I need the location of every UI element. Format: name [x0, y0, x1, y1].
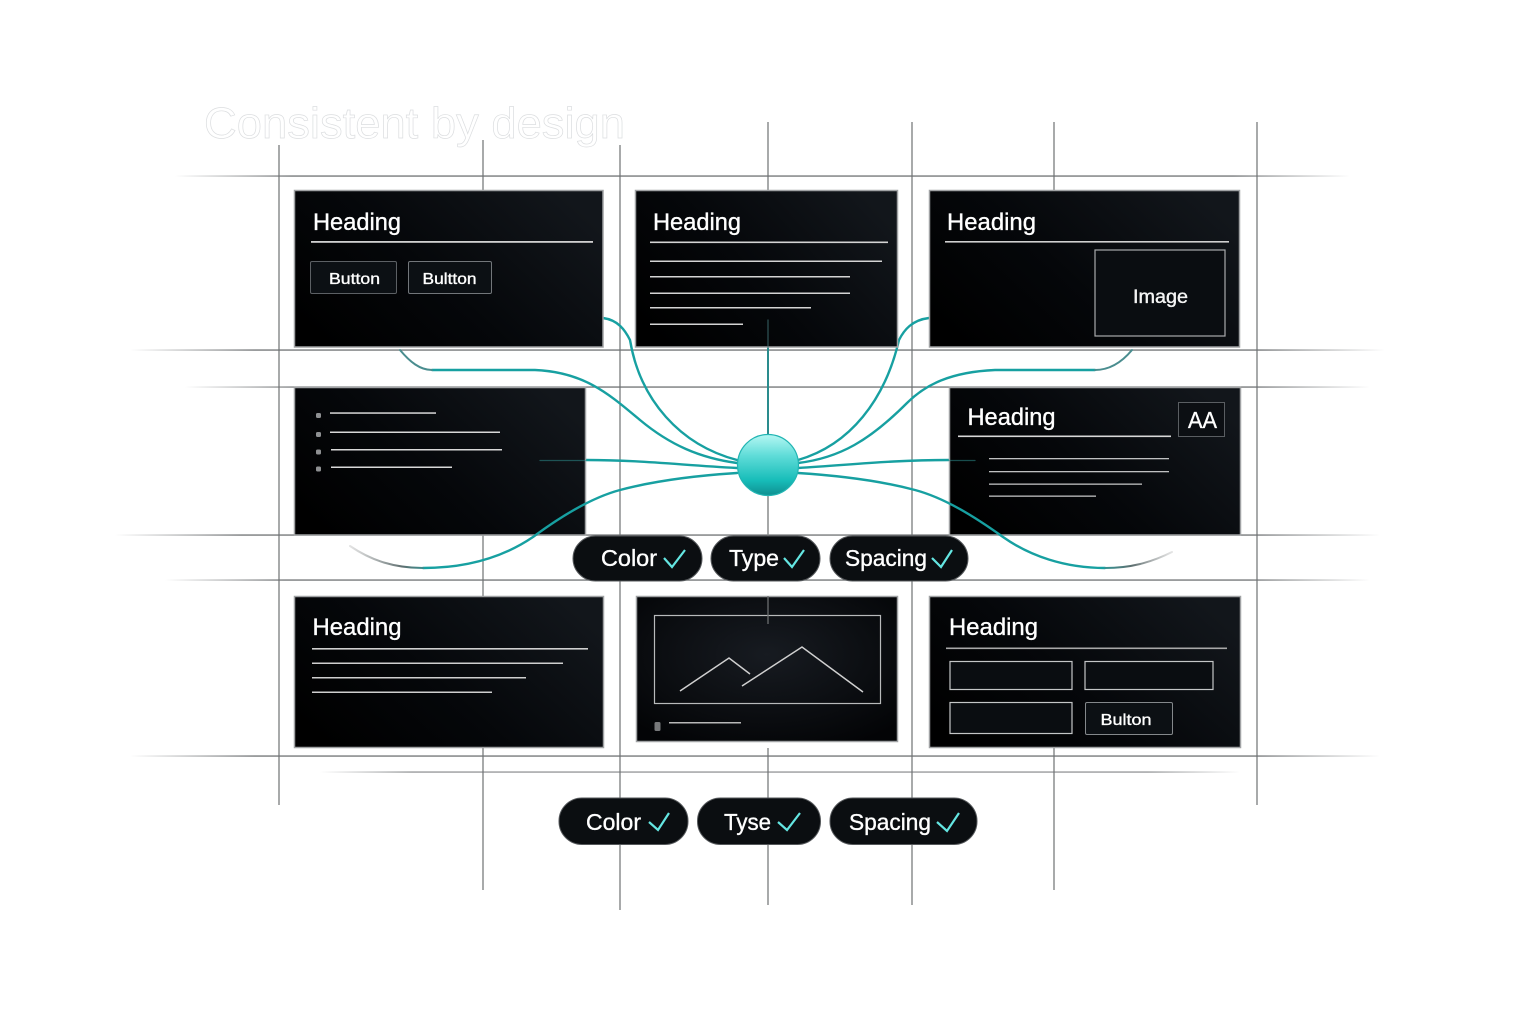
connector lines to hub: [400, 318, 1132, 536]
pill: type: Type: [729, 545, 779, 571]
image placeholder: Image: [1133, 287, 1188, 308]
button: [1086, 702, 1172, 734]
pill: tyse: [698, 798, 820, 844]
layout grid lines: [115, 122, 1385, 910]
pill: color: [559, 798, 688, 844]
pill: spacing: Spacing: [849, 809, 931, 835]
bullets: [316, 413, 321, 472]
divider: [958, 436, 1171, 437]
button 2: Bultton: [422, 271, 476, 288]
text lines: [312, 648, 588, 693]
panel: form with button: [930, 596, 1240, 748]
heading: Heading: [968, 404, 1056, 431]
title: Consistent by design: [204, 99, 625, 148]
image placeholder: [1095, 250, 1225, 336]
AA type badge: AA: [1188, 407, 1218, 433]
caption bullet: [654, 722, 660, 731]
pill: type: [711, 536, 820, 581]
pill: spacing: Spacing: [845, 545, 927, 571]
panel: image chart: [636, 596, 898, 742]
divider: [946, 648, 1227, 649]
list lines: [330, 412, 502, 468]
panel: heading with paragraph: [294, 596, 604, 748]
button 1: [310, 262, 396, 294]
heading: Heading: [312, 614, 402, 641]
panel: heading with image: [930, 190, 1240, 347]
mountain peaks: [680, 647, 863, 692]
panel: heading with AA: [950, 388, 1240, 535]
panel: heading with buttons: [294, 190, 603, 347]
pill: tyse: Tyse: [724, 809, 771, 835]
text lines: [650, 242, 888, 325]
divider: [945, 241, 1229, 243]
form fields: [950, 662, 1213, 734]
button 1: Button: [329, 271, 380, 288]
text lines: [989, 458, 1169, 497]
heading: Heading: [947, 209, 1036, 236]
pill: color: [573, 536, 702, 581]
AA type badge: [1178, 402, 1224, 436]
tick inside chart panel: [767, 596, 769, 624]
status pills: upper row: [573, 536, 968, 581]
connector lines crossing over panels: [350, 320, 1172, 568]
caption line: [669, 722, 741, 724]
heading: Heading: [949, 614, 1038, 641]
divider: [311, 241, 593, 243]
button 2: [408, 262, 492, 294]
heading: Heading: [653, 209, 741, 236]
image frame: [654, 616, 880, 704]
pill: color: Color: [601, 545, 657, 571]
pill: spacing: [830, 536, 968, 581]
pill: spacing: [830, 798, 977, 844]
button: Bulton: [1100, 712, 1152, 729]
central hub sphere: [738, 434, 798, 496]
heading: Heading: [313, 209, 401, 236]
panel: bullet list: [294, 388, 586, 535]
panel: heading with text lines: [636, 190, 898, 347]
status pills: lower row: [559, 798, 977, 844]
pill: color: Color: [586, 809, 641, 835]
